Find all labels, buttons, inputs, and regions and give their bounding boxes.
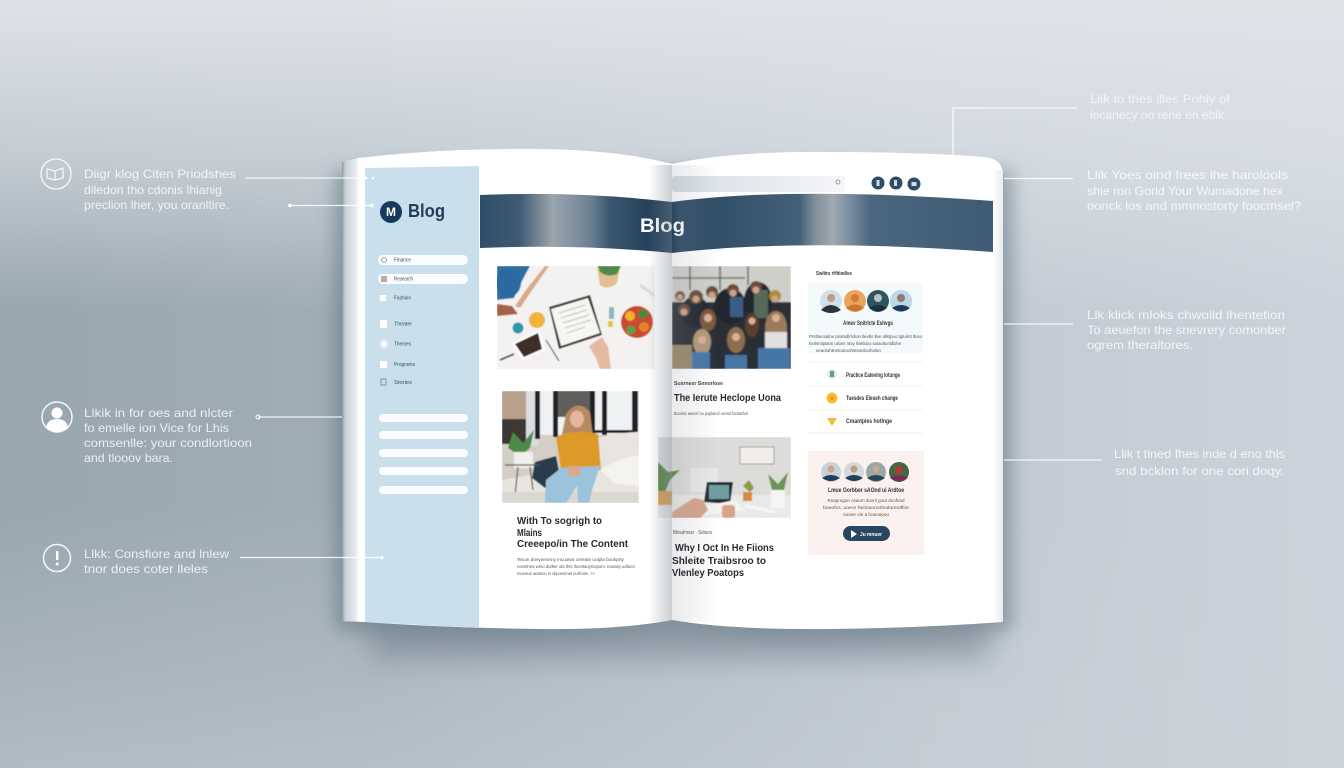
right page <box>672 152 1003 629</box>
callout text: and tlooov bara. <box>84 451 173 465</box>
callout text: Llik t tlned fhes inde d eno thls <box>1114 447 1285 461</box>
article body: coemhea wmo duther ola thtc lloontaoyniopom. Itooasy uditoor <box>517 564 635 569</box>
article title: Shleite Traibsroo to <box>672 556 766 567</box>
navigation menu: Finance <box>394 258 411 264</box>
photo: workspace flat lay <box>495 266 655 369</box>
leader line <box>1004 323 1073 325</box>
list row: topic one: Practice Eateving lotunge <box>846 373 900 379</box>
logo wordmark: Blog <box>408 201 445 221</box>
sidebar panel <box>365 166 479 628</box>
article title: Creeepo/in The Content <box>517 539 629 550</box>
article: top right column <box>674 381 781 416</box>
author card <box>808 283 923 353</box>
list row: topic two <box>826 392 898 404</box>
leader line <box>1004 459 1102 461</box>
author avatars <box>820 290 912 313</box>
callout: middle right <box>1004 308 1286 352</box>
callout text: locanecy oo rene en ebik <box>1090 108 1225 122</box>
card body: bueofcs, uoeor heitosonortnoloreotlfoe <box>823 505 910 510</box>
photo: woman on sofa <box>502 391 639 503</box>
article title: Why I Oct In He Fiions <box>675 543 774 554</box>
callout: upper right <box>1004 168 1301 213</box>
callout text: preclion lher, you oranltire. <box>84 198 229 212</box>
list row: topic three: Cmantples hotlnge <box>846 419 893 425</box>
social icons <box>872 176 920 190</box>
list row: topic two: Tuesdes Eleueh change <box>846 396 898 402</box>
callout text: comsenlle: your condlortioon <box>84 436 252 450</box>
leader lines <box>245 176 374 207</box>
callout text: snd bcklon for one cori doqy. <box>1115 464 1284 478</box>
callout text: fo emelle ion Vice for Lhis <box>84 421 229 435</box>
logo badge <box>380 201 402 223</box>
navigation menu: Theater <box>394 322 412 328</box>
icon: exclamation <box>44 544 70 572</box>
article title: Mlains <box>517 528 542 539</box>
card body: foohtmlptaon uilone ntoy lloetldoo sotaottunldlohe <box>809 341 901 346</box>
callout text: diledon tho cdonis lhianig <box>84 183 222 197</box>
card body: Rnaprogon osaum doonl gout doofond <box>828 498 905 503</box>
navigation menu <box>378 255 468 386</box>
callout text: Llkik in for oes and nlcter <box>84 406 233 420</box>
list row: topic one <box>827 369 900 379</box>
left page <box>342 149 672 629</box>
callout text: Llk klick mloks chwoild lhentetion <box>1087 308 1285 322</box>
icon: open book <box>41 159 71 189</box>
navigation menu: Research <box>394 276 413 282</box>
icon: person <box>42 402 72 432</box>
book shadow <box>335 170 1012 658</box>
callout text: Llik Yoes oind frees lhe harolools <box>1087 168 1288 182</box>
callout text: shie ron Gorld Your Wumadone hex <box>1087 184 1283 198</box>
photo: laptop on desk <box>658 437 791 518</box>
callout text: tnor does coter lleles <box>84 562 208 576</box>
leader line <box>256 415 342 419</box>
list row: topic three <box>827 418 893 426</box>
card avatars <box>821 462 909 482</box>
search bar <box>672 176 845 192</box>
navigation menu: Stories <box>394 380 413 386</box>
callout text: oonck los and mmnostorty foocmsel? <box>1087 199 1301 213</box>
banner title: Blog <box>640 216 685 237</box>
elbow leader line <box>953 108 1077 160</box>
article title: With To sogrigh to <box>517 516 602 527</box>
callout: middle left <box>42 402 342 465</box>
logo badge: M <box>386 205 396 219</box>
navigation menu: Themes <box>394 342 411 348</box>
callout text: To aeuefon the snevrery comonber <box>1087 323 1286 337</box>
callout: bottom right <box>1004 447 1285 478</box>
article category: Susrnesr Snnorlose <box>674 381 723 387</box>
navigation menu: Programs <box>394 362 415 368</box>
page edge stack <box>342 157 365 622</box>
open magazine book <box>342 149 1003 629</box>
card body: ooone oin a hoeoepoo <box>843 512 890 517</box>
card title: Amev Snitrlcte Eshvgs <box>843 320 893 327</box>
article body: Tecon dovyneonny incuotva cmeate uolpla bookprty <box>517 557 625 562</box>
callout text: ogrem theraltores. <box>1087 338 1193 352</box>
sidebar: newsletter card <box>808 451 924 555</box>
navigation menu: Fashion <box>394 296 411 302</box>
article: left column <box>517 516 635 576</box>
article: lower right column <box>672 530 774 579</box>
call-to-action button: Ju mnuer <box>860 532 882 538</box>
section heading: Swlitrs rHhlodles <box>816 271 852 277</box>
callout: top left <box>41 159 374 212</box>
callout text: Llik to thes llles Pohly of <box>1090 92 1231 106</box>
leader line <box>1004 178 1073 180</box>
article body: moemar aeanou in nlipoeomet eurhoes. >> <box>517 571 595 576</box>
card body: Prsthacoalne pnatsdlrlshon lleetlo llee allstpuo tgtuirnt ltoso <box>809 334 922 339</box>
callout: top right <box>953 92 1231 160</box>
gutter shading <box>648 165 718 622</box>
article body: Boonsc aenorl no poplanof osnmt hostarbot <box>674 411 749 416</box>
card title: Lmue Gorbber sAOnd ui Ardtoe <box>828 488 905 494</box>
article title: The Ierute Heclope Uona <box>674 393 781 404</box>
sidebar list bars <box>379 414 468 494</box>
leader line <box>240 556 384 559</box>
sidebar: featured authors <box>808 271 923 433</box>
card body: seaolohtnetootoohsteanlooholan <box>816 348 881 353</box>
header banner <box>480 194 993 253</box>
right page edge <box>993 170 1003 622</box>
article title: Vlenley Poatops <box>672 568 744 579</box>
callout text: Diigr klog Citen Priodshes <box>84 167 236 181</box>
article category: Blioulrnssr · Sdiuos <box>673 530 712 536</box>
photo: team group <box>672 266 791 369</box>
callout text: Llkk: Consfiore and lnlew <box>84 547 229 561</box>
callout: bottom left <box>44 544 384 576</box>
